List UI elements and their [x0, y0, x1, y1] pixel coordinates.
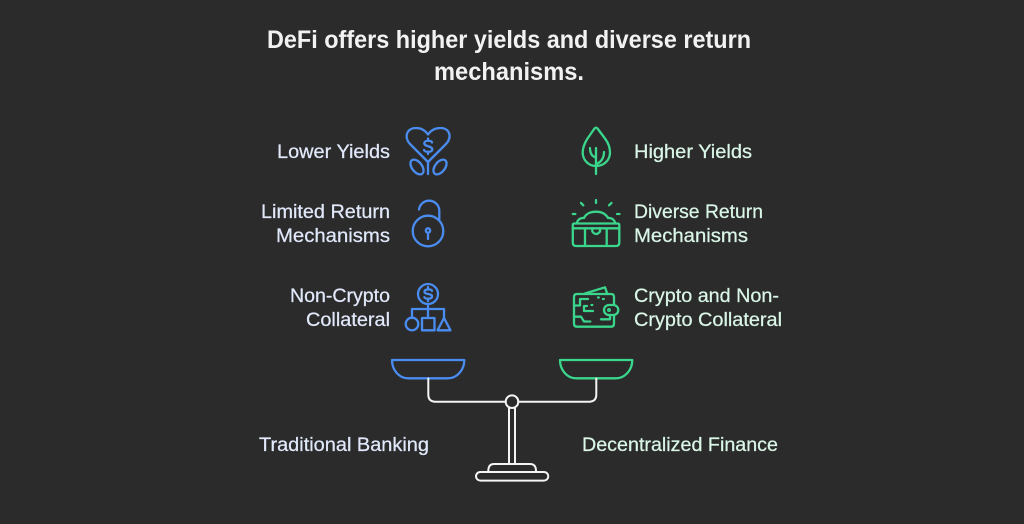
title — [267, 26, 751, 86]
icon: crypto wallet — [574, 287, 618, 327]
beam — [428, 378, 596, 402]
label: Diverse Return Mechanisms — [634, 201, 763, 247]
label: Limited Return Mechanisms: Limited Return — [261, 201, 390, 223]
icon: treasure chest — [573, 200, 620, 246]
label: Lower Yields: Lower Yields — [277, 141, 390, 163]
scale balance — [392, 360, 632, 481]
base — [488, 464, 536, 471]
plate — [476, 472, 548, 481]
label: Limited Return Mechanisms: Mechanisms — [276, 225, 390, 247]
label: Limited Return Mechanisms — [261, 201, 390, 247]
icon: leaf tree — [583, 128, 610, 174]
title: mechanisms. — [434, 58, 584, 86]
label: Diverse Return Mechanisms: Mechanisms — [634, 225, 748, 247]
label: Non-Crypto Collateral: Non-Crypto — [290, 285, 390, 307]
label: Non-Crypto Collateral — [290, 285, 390, 331]
column — [509, 408, 515, 464]
label: Higher Yields: Higher Yields — [634, 141, 752, 163]
label: Non-Crypto Collateral: Collateral — [306, 309, 390, 331]
icon: open padlock — [413, 201, 443, 246]
label: Traditional Banking: Traditional Banking — [259, 434, 429, 456]
left pan — [392, 360, 464, 378]
label: Crypto and Non-Crypto Collateral: Crypto Collateral — [634, 309, 782, 331]
title: DeFi offers higher yields and diverse return — [267, 26, 751, 54]
label: Crypto and Non-Crypto Collateral: Crypto and Non- — [634, 285, 779, 307]
label: Diverse Return Mechanisms: Diverse Return — [634, 201, 763, 223]
right pan — [560, 360, 632, 378]
pivot — [506, 395, 518, 408]
icon: heart with dollar and leaves — [407, 128, 450, 177]
icon: dollar hierarchy with shapes — [406, 284, 450, 330]
label: Crypto and Non-Crypto Collateral — [634, 285, 782, 331]
label: Decentralized Finance: Decentralized Finance — [582, 434, 778, 456]
